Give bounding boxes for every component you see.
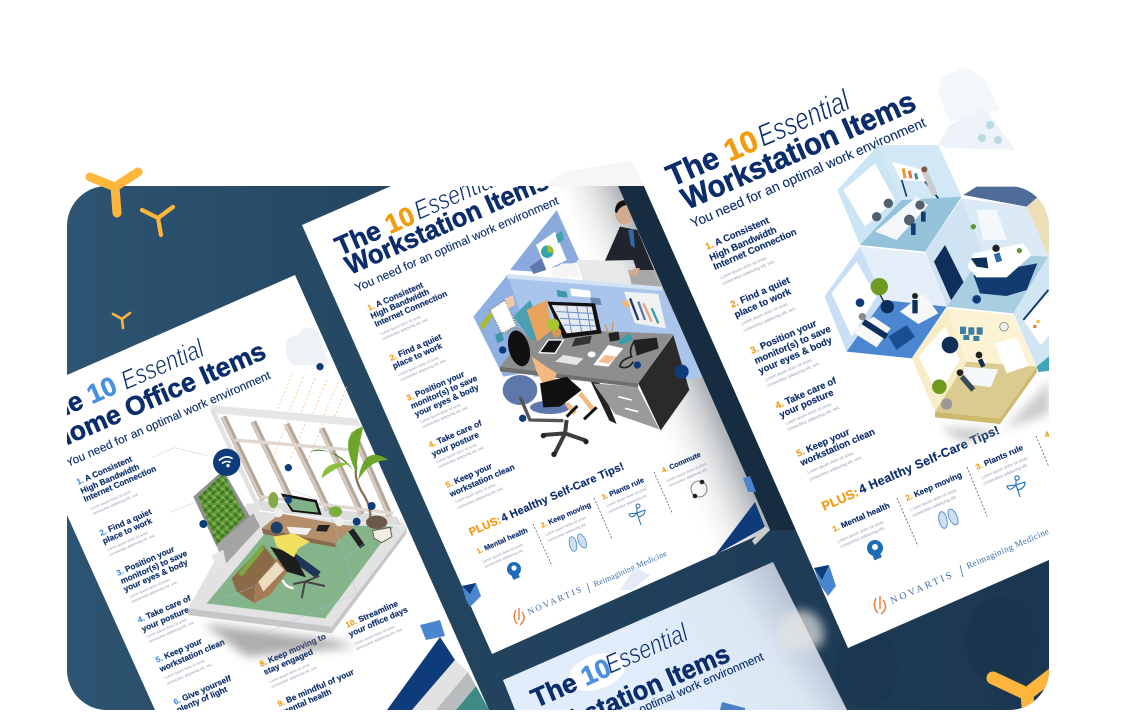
- list item 3: [116, 547, 188, 603]
- self-care heading: [819, 423, 1001, 514]
- icon: footprints: [937, 508, 960, 529]
- title: home office: The 10: [32, 370, 121, 431]
- list item 3: consectetur adipiscing elit, sed.: [422, 405, 469, 429]
- tip 2: consectetur adipiscing elit.: [911, 494, 957, 518]
- room: top strip: [963, 187, 1053, 257]
- list item 4: 4. Take care of: [136, 593, 192, 625]
- title: bottom poster: The 10: [526, 652, 615, 713]
- list item 1: Lorem ipsum dolor sit amet,: [719, 255, 768, 280]
- cloud: [568, 653, 626, 691]
- tip 2: 2. Keep moving: [904, 470, 963, 503]
- title: hex poster: Essential: [752, 83, 856, 153]
- list item 3: Lorem ipsum dolor sit amet,: [764, 357, 813, 382]
- novartis logo: [874, 526, 1050, 614]
- list item 3: [749, 318, 834, 388]
- list item 2: Lorem ipsum dolor sit amet,: [398, 355, 440, 377]
- title: bottom poster: [528, 622, 764, 710]
- list item 6: plenty of light: [175, 684, 229, 715]
- faint shadow at top of centre poster: [545, 160, 644, 186]
- room: lounge: [824, 247, 947, 358]
- icon: small yellow Y: [113, 313, 130, 328]
- illustration: isometric home office: [152, 363, 407, 657]
- sheet: hex rooms poster: [628, 0, 1053, 648]
- list item 1: 1. A Consistent: [704, 215, 772, 253]
- list item 1: consectetur adipiscing elit, sed.: [92, 492, 139, 516]
- list item 2: consectetur adipiscing elit, sed.: [400, 358, 447, 382]
- list item 1: 1. A Consistent: [366, 280, 425, 313]
- band: shadow between posters: [618, 186, 796, 530]
- corner shape: blue block: [814, 565, 836, 596]
- tip 3: [974, 443, 1029, 497]
- title: home office: Home Office Items: [46, 336, 270, 455]
- self-care heading: 4 Healthy Self-Care Tips!: [857, 423, 1001, 497]
- list item 2: place to work: [391, 340, 444, 371]
- list item 3: consectetur adipiscing elit, sed.: [131, 580, 178, 604]
- list item 2: Lorem ipsum dolor sit amet,: [740, 301, 789, 326]
- list item 1: [366, 280, 449, 341]
- panel: dark navy background: [67, 186, 1049, 710]
- list item 5: [445, 464, 515, 509]
- title: workstation: [332, 186, 549, 274]
- list item 4: consectetur adipiscing elit, sed.: [786, 405, 841, 432]
- list item 1: consectetur adipiscing elit, sed.: [721, 259, 776, 286]
- list item 4: [136, 593, 195, 644]
- list item 4: consectetur adipiscing elit, sed.: [438, 445, 485, 469]
- list item 1: Internet Connection: [82, 463, 158, 504]
- tip 4: Lorem ipsum dolor sit amet,: [666, 461, 708, 483]
- list item 1: Internet Connection: [373, 288, 449, 329]
- list item 10: 10. Streamline: [344, 598, 400, 630]
- title: workstation: Essential: [409, 163, 502, 225]
- icon: yellow Y bottom right: [993, 670, 1058, 722]
- novartis logo: NOVARTIS: [889, 570, 954, 607]
- tip 3: consectetur adipiscing elit.: [608, 493, 648, 514]
- list item 5: Lorem ipsum dolor sit amet,: [455, 482, 497, 504]
- list item 4: Lorem ipsum dolor sit amet,: [146, 617, 188, 639]
- list item 4: Lorem ipsum dolor sit amet,: [784, 401, 833, 426]
- cloud: [286, 328, 330, 365]
- subtitle: You need for an optimal work environment: [64, 368, 273, 470]
- list item 8: [259, 635, 326, 688]
- list item 4: your posture: [778, 387, 835, 421]
- self-care heading: [467, 461, 626, 539]
- corner shapes: sheet one base: [387, 620, 489, 710]
- list item 4: 4. Take care of: [427, 418, 483, 450]
- self-care heading: 4 Healthy Self-Care Tips!: [499, 461, 626, 525]
- icon: head with heart: [867, 540, 883, 560]
- tip 1: Lorem ipsum dolor sit amet,: [482, 542, 524, 564]
- icon: head with heart: [507, 562, 521, 580]
- list item 4: 4. Take care of: [774, 375, 839, 412]
- room: meeting: [837, 145, 962, 252]
- list item 5: workstation clean: [798, 426, 877, 469]
- list item 3: 3. Position your: [405, 368, 467, 403]
- list item 2: [100, 509, 156, 556]
- icon: footprints: [568, 534, 587, 552]
- list item 5: [155, 639, 225, 685]
- list item 3: Lorem ipsum dolor sit amet,: [129, 577, 171, 599]
- list item 5: 5. Keep your: [795, 427, 852, 460]
- novartis logo: Reimagining Medicine: [592, 549, 668, 589]
- novartis logo: NOVARTIS: [526, 584, 583, 617]
- list item 10: [346, 602, 408, 650]
- list item 8: stay engaged: [262, 646, 314, 677]
- list item 1: [75, 454, 158, 516]
- icon: sprout: [629, 504, 645, 525]
- list item 2: [390, 334, 446, 381]
- tip 3: 3. Plants rule: [974, 443, 1025, 472]
- list item 3: 3. Position your: [115, 543, 177, 578]
- self-care heading: PLUS:: [467, 514, 503, 539]
- tip 4 number: 4.: [1043, 429, 1053, 440]
- icon: sprout: [1007, 476, 1025, 497]
- list item 5: consectetur adipiscing elit, sed.: [166, 662, 213, 686]
- list item 3: your eyes & body: [757, 335, 834, 377]
- subtitle: You need for an optimal work environment: [353, 193, 561, 295]
- list item 9: mental health: [280, 686, 333, 717]
- face silhouettes in the background: [834, 596, 1034, 708]
- icon: medium yellow Y: [142, 207, 173, 235]
- tip 2: 2. Keep moving: [539, 500, 592, 530]
- list item 10: Lorem ipsum dolor sit amet,: [354, 624, 396, 646]
- list item 8: consectetur adipiscing elit, sed.: [271, 665, 318, 689]
- list item 9: 9. Be mindful of your: [276, 666, 356, 709]
- tip 4: consectetur adipiscing elit.: [668, 467, 708, 488]
- list item 4: [774, 375, 841, 432]
- list item 1: [704, 215, 799, 286]
- subtitle: You need for an optimal work environment: [688, 115, 928, 231]
- illustration: hexagonal rooms: [824, 145, 1053, 443]
- list item 3: 3. Position your: [749, 318, 819, 357]
- tip 3: 3. Plants rule: [600, 475, 645, 502]
- list item 3: monitor(s) to save: [119, 548, 189, 586]
- title: hex poster: The 10: [661, 124, 763, 193]
- list item 2: 2. Find a quiet: [729, 275, 793, 311]
- list item 2: 2. Find a quiet: [98, 506, 153, 538]
- tip 1: Lorem ipsum dolor sit amet,: [836, 519, 885, 544]
- list item 5: Lorem ipsum dolor sit amet,: [164, 658, 206, 680]
- tip 1: [475, 526, 529, 580]
- list item 4: your posture: [140, 604, 191, 634]
- list item 2: consectetur adipiscing elit, sed.: [742, 306, 797, 333]
- novartis logo: Reimagining Medicine: [965, 526, 1050, 571]
- title: workstation: Workstation Items: [340, 165, 553, 280]
- list item 10: your office days: [347, 604, 409, 639]
- list item 5: 5. Keep your: [154, 635, 204, 665]
- tip 1: consectetur adipiscing elit.: [484, 548, 524, 569]
- sheet: home office poster: [32, 275, 489, 717]
- list item 1: Lorem ipsum dolor sit amet,: [90, 489, 132, 511]
- room: cream office: [912, 308, 1037, 424]
- tip 1: 1. Mental health: [831, 501, 891, 534]
- tip 3: [600, 475, 648, 525]
- list item 5: consectetur adipiscing elit, sed.: [808, 455, 863, 482]
- list item 4: your posture: [430, 429, 481, 459]
- room: right edge calendar: [1013, 257, 1051, 372]
- list item 1: consectetur adipiscing elit, sed.: [382, 317, 429, 341]
- cloud: [939, 68, 1000, 122]
- tip 1: [831, 501, 891, 560]
- list item 4: [427, 418, 485, 469]
- title: bottom poster: Essential: [600, 617, 693, 679]
- list item 3: your eyes & body: [413, 382, 481, 419]
- tip 1: consectetur adipiscing elit.: [839, 525, 885, 549]
- list item 10: consectetur adipiscing elit, sed.: [356, 627, 403, 651]
- tip 4: 4. Commute: [660, 450, 702, 475]
- sheet: cubicle workstation poster: [302, 163, 770, 654]
- tip 2: Lorem ipsum dolor sit amet,: [909, 487, 958, 512]
- list item 1: 1. A Consistent: [75, 454, 134, 487]
- list item 5: workstation clean: [447, 462, 516, 499]
- list item 3: [406, 372, 478, 428]
- list item 1: High Bandwidth: [79, 461, 141, 496]
- list item 1: High Bandwidth: [708, 225, 779, 264]
- room: reception: [925, 198, 1048, 313]
- tip 4: [662, 453, 708, 498]
- tip 2: consectetur adipiscing elit.: [547, 522, 587, 543]
- tip 3: consectetur adipiscing elit.: [982, 462, 1028, 486]
- illustration fragment: [720, 702, 745, 710]
- tip 3: Lorem ipsum dolor sit amet,: [606, 486, 648, 508]
- list item 1: Lorem ipsum dolor sit amet,: [380, 314, 422, 336]
- list item 2: place to work: [733, 286, 793, 321]
- list item 3: your eyes & body: [122, 557, 190, 594]
- list item 1: Internet Connection: [712, 227, 799, 273]
- title: hex poster: Workstation Items: [676, 84, 921, 216]
- list item 1: High Bandwidth: [369, 286, 431, 321]
- list item 2: 2. Find a quiet: [388, 331, 443, 363]
- cloud on right: [780, 610, 824, 650]
- list item 5: 5. Keep your: [444, 460, 494, 490]
- list item 5: Lorem ipsum dolor sit amet,: [806, 450, 855, 475]
- list item 6: 6. Give yourself: [172, 673, 233, 707]
- corner shapes: sheet two: [462, 476, 770, 607]
- faded room at the top right: [938, 108, 1015, 150]
- icon: commute arrows: [691, 480, 707, 498]
- tip 2: [539, 500, 592, 552]
- tip 3: Lorem ipsum dolor sit amet,: [980, 455, 1029, 480]
- tip 2: [904, 470, 963, 529]
- illustration: cubicle: [473, 200, 705, 457]
- list item 5: workstation clean: [157, 637, 226, 674]
- list item 3: monitor(s) to save: [409, 373, 479, 411]
- novartis logo: [514, 549, 668, 625]
- title: workstation: The 10: [330, 200, 419, 261]
- sheet: bottom light-blue poster: [503, 562, 847, 710]
- list item 4: Lorem ipsum dolor sit amet,: [436, 442, 478, 464]
- list item 3: monitor(s) to save: [753, 324, 833, 367]
- list item 2: Lorem ipsum dolor sit amet,: [107, 530, 149, 552]
- list item 2: [729, 275, 797, 333]
- list item 2: place to work: [101, 515, 154, 546]
- icon: large yellow Y top left: [90, 172, 138, 213]
- list item 8: 8. Keep moving to: [258, 631, 327, 669]
- title: home office: Essential: [116, 333, 209, 395]
- tip 2: Lorem ipsum dolor sit amet,: [545, 515, 587, 537]
- self-care heading: PLUS:: [819, 484, 861, 514]
- list item 3: consectetur adipiscing elit, sed.: [766, 361, 821, 388]
- tip 1: 1. Mental health: [475, 526, 529, 556]
- list item 4: consectetur adipiscing elit, sed.: [148, 620, 195, 644]
- list item 3: Lorem ipsum dolor sit amet,: [420, 402, 462, 424]
- list item 5: consectetur adipiscing elit, sed.: [457, 486, 504, 510]
- list item 2: consectetur adipiscing elit, sed.: [109, 533, 156, 557]
- list item 8: Lorem ipsum dolor sit amet,: [269, 662, 311, 684]
